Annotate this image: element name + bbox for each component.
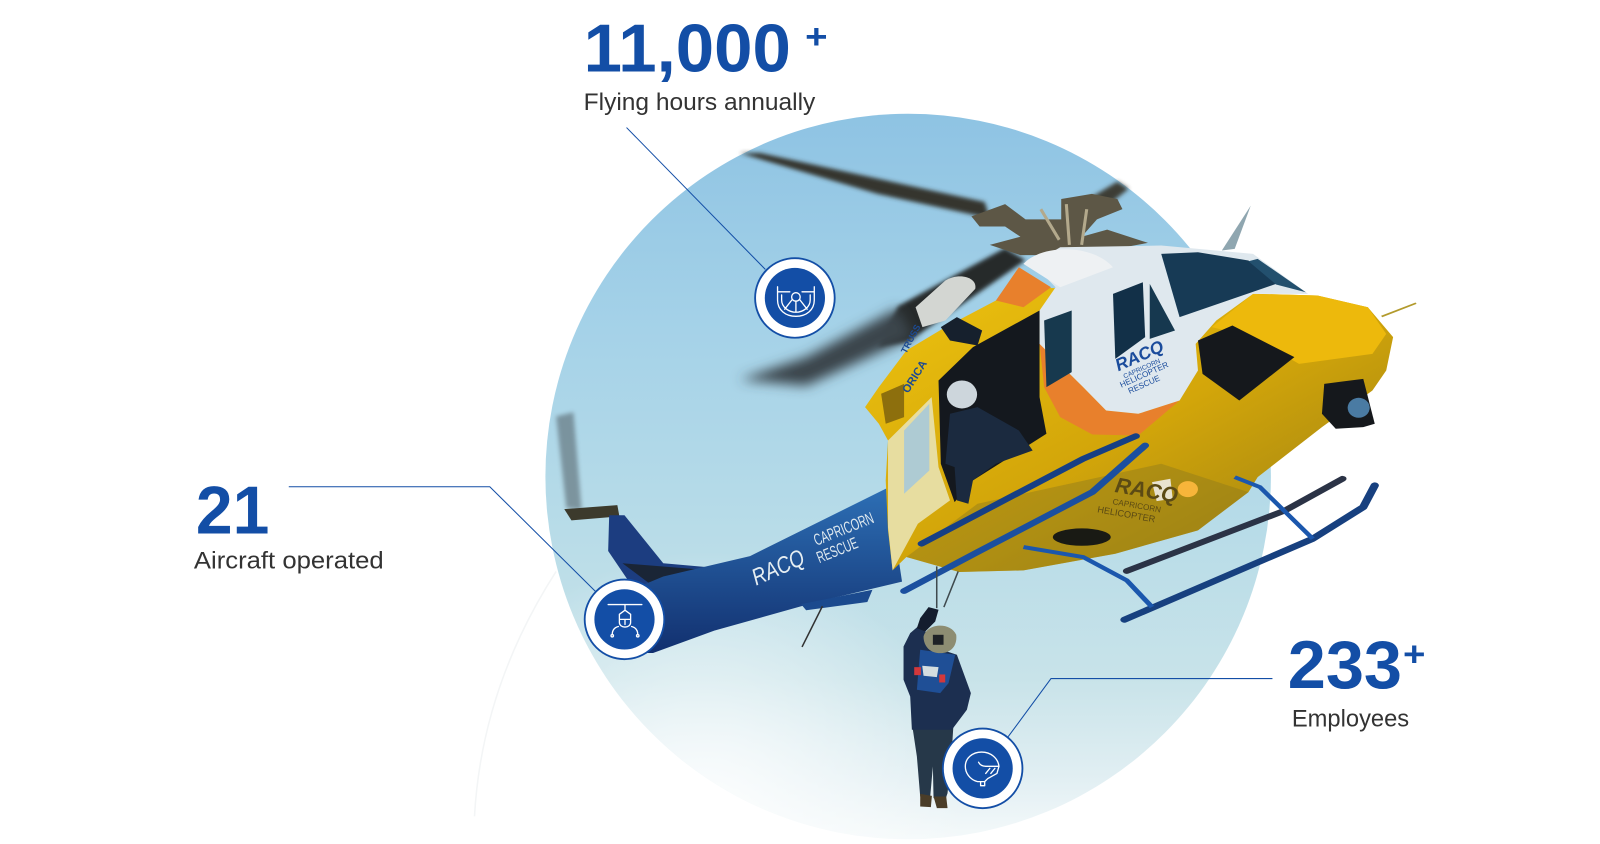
right shoulder patch bbox=[939, 674, 945, 682]
harness bbox=[917, 650, 955, 693]
crew member bbox=[945, 407, 1033, 504]
boom antenna bbox=[802, 606, 822, 647]
front step rail bbox=[904, 445, 1145, 591]
back patch bbox=[922, 666, 939, 677]
windshield right bbox=[1248, 259, 1306, 292]
fuselage lettering bbox=[899, 323, 1180, 524]
connector: employees bbox=[1008, 679, 1272, 737]
icon: steering yoke bbox=[755, 258, 835, 338]
nose antenna bbox=[1382, 303, 1416, 317]
belly text capricorn: CAPRICORN bbox=[1112, 497, 1162, 515]
belly text helicopter: HELICOPTER bbox=[1097, 504, 1156, 524]
landing skid rear bbox=[1124, 485, 1375, 620]
rotor hub bbox=[971, 194, 1148, 255]
searchlight arm bbox=[941, 317, 982, 346]
stat: flying hours bbox=[584, 11, 828, 116]
raised arm glove bbox=[917, 607, 939, 631]
boom text RACQ: RACQ bbox=[748, 544, 808, 590]
upper step rail bbox=[922, 436, 1136, 544]
cabin text RACQ: RACQ bbox=[1112, 336, 1167, 375]
stat: aircraft operated: 21 bbox=[196, 474, 269, 549]
rear door glass bbox=[904, 404, 929, 494]
stat: flying hours: + bbox=[805, 18, 828, 56]
connector: aircraft bbox=[289, 487, 596, 592]
belly hatch bbox=[1053, 528, 1111, 546]
chin window bbox=[1198, 326, 1294, 400]
tail fin bbox=[608, 515, 755, 592]
stat: employees: 233 bbox=[1288, 628, 1402, 703]
stat: flying hours: 11,000 bbox=[584, 11, 791, 86]
orange stripe bbox=[1040, 344, 1180, 435]
photo: sky circle bbox=[545, 114, 1271, 839]
stat: flying hours: Flying hours annually bbox=[584, 89, 816, 116]
windshield left bbox=[1161, 252, 1276, 317]
roof dome bbox=[1023, 249, 1113, 287]
belly beacon bbox=[1152, 479, 1173, 501]
belly shading bbox=[906, 464, 1248, 572]
camera turret bbox=[1322, 379, 1375, 429]
belly light bbox=[1178, 481, 1198, 497]
tail boom bbox=[602, 488, 902, 653]
photo: helicopter main rotor bbox=[740, 153, 1148, 386]
tail rotor bbox=[556, 412, 619, 520]
door window large bbox=[1113, 282, 1145, 359]
white cabin bbox=[1033, 246, 1308, 414]
belly text RACQ: RACQ bbox=[1113, 473, 1180, 508]
torso bbox=[904, 623, 971, 730]
icon: helmet bbox=[943, 729, 1022, 808]
rear blade bbox=[740, 153, 990, 218]
landing skid inner bbox=[1127, 479, 1343, 571]
cabin text capricorn: CAPRICORN bbox=[1122, 358, 1162, 380]
stat: aircraft operated: Aircraft operated bbox=[194, 547, 384, 574]
rear door panel bbox=[888, 397, 950, 570]
photo: winchman bbox=[904, 607, 971, 808]
boom text Capricorn: CAPRICORN bbox=[811, 509, 876, 550]
door window narrow bbox=[1150, 284, 1175, 339]
stat: employees: Employees bbox=[1292, 706, 1409, 733]
skid strut left bbox=[1023, 547, 1152, 607]
faint background arc bbox=[474, 571, 556, 816]
tail stabiliser bbox=[622, 563, 753, 594]
stat: employees bbox=[1288, 628, 1426, 733]
crew helmet bbox=[947, 380, 977, 408]
icon: helicopter bbox=[585, 580, 664, 659]
lower blade root bbox=[878, 248, 1026, 347]
boots bbox=[920, 794, 948, 808]
left shoulder patch bbox=[914, 667, 921, 675]
boom text Rescue: RESCUE bbox=[814, 534, 861, 567]
searchlight pod bbox=[916, 276, 975, 327]
roof antenna bbox=[1222, 206, 1251, 251]
nose highlight bbox=[1212, 294, 1386, 364]
stat: employees: + bbox=[1403, 635, 1426, 673]
legs bbox=[912, 723, 954, 800]
sponsor mark truss: TRUSS bbox=[899, 323, 922, 355]
helmet bbox=[924, 626, 956, 653]
photo: helicopter tail section bbox=[556, 412, 902, 653]
lower blade tip bbox=[740, 308, 913, 386]
cabin text rescue: RESCUE bbox=[1127, 373, 1162, 396]
helmet visor box bbox=[933, 635, 944, 645]
orange roof patch bbox=[996, 267, 1051, 307]
camera lens bbox=[1348, 398, 1370, 418]
door opening bbox=[939, 311, 1046, 502]
stat: aircraft operated bbox=[194, 474, 384, 574]
right blade bbox=[1071, 182, 1129, 222]
connector: flying hours bbox=[627, 128, 765, 269]
door window front bbox=[1044, 311, 1072, 387]
boom underside fin bbox=[801, 590, 872, 610]
photo: helicopter fuselage bbox=[865, 206, 1416, 620]
yellow body bbox=[865, 287, 1393, 572]
cabin text helicopter: HELICOPTER bbox=[1119, 360, 1170, 390]
skid strut right bbox=[1235, 477, 1313, 539]
rear cabin window frame bbox=[881, 384, 904, 424]
sponsor mark orica: ORICA bbox=[901, 358, 930, 395]
photo: winch cable bbox=[937, 566, 958, 608]
